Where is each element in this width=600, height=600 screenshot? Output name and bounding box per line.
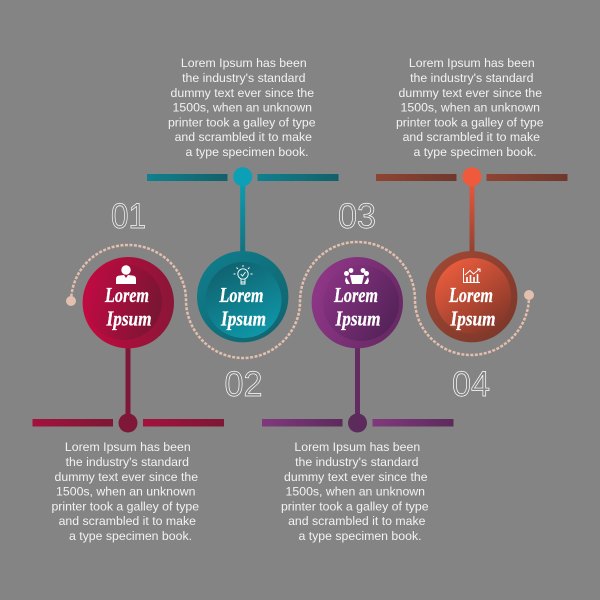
circle badge 3	[312, 257, 403, 348]
circle badge 1	[83, 257, 174, 348]
badge label 3	[333, 283, 380, 330]
number 02: 02	[224, 365, 262, 404]
badge label 4: Lorem	[448, 283, 493, 307]
connector stem and bar 4	[376, 167, 568, 255]
dotted winding path	[66, 242, 534, 358]
text block 3: printer took a galley of type	[281, 499, 429, 513]
text block 4: the industry's standard	[410, 71, 534, 85]
text block 2: printer took a galley of type	[168, 115, 316, 129]
connector stem and bar 2	[147, 167, 338, 255]
connector stem and bar 1	[32, 345, 224, 432]
connector stem and bar 3	[262, 345, 454, 432]
badge label 2	[219, 283, 266, 330]
badge label 2: Lorem	[219, 283, 264, 307]
number 03: 03	[338, 197, 376, 236]
text block 2: and scrambled it to make	[175, 130, 312, 144]
text block 3: dummy text ever since the	[284, 470, 428, 484]
text block 4: Lorem Ipsum has been	[409, 56, 535, 70]
text block 1: 1500s, when an unknown	[56, 485, 196, 499]
badge label 1: Lorem	[104, 283, 149, 307]
text block 3: the industry's standard	[295, 455, 419, 469]
text block 2: dummy text ever since the	[171, 86, 314, 100]
badge label 4: Ipsum	[450, 306, 496, 330]
badge label 1	[104, 283, 152, 330]
circle badge 2	[197, 251, 288, 342]
text block 1: printer took a galley of type	[51, 499, 199, 513]
text block 1: Lorem Ipsum has been	[65, 440, 191, 454]
text block 1: a type specimen book.	[69, 529, 192, 543]
badge label 3: Lorem	[333, 283, 378, 307]
badge label 1: Ipsum	[106, 306, 152, 330]
text block 1: and scrambled it to make	[59, 514, 196, 528]
badge label 2: Ipsum	[220, 306, 266, 330]
text block 3: a type specimen book.	[298, 529, 422, 543]
text block 2: 1500s, when an unknown	[173, 101, 312, 115]
badge label 3: Ipsum	[335, 306, 380, 330]
icon: team meeting	[344, 268, 369, 284]
text block 1: dummy text ever since the	[55, 470, 198, 484]
text block 1: the industry's standard	[66, 455, 189, 469]
icon: bar chart	[464, 268, 480, 282]
text block 3: Lorem Ipsum has been	[294, 440, 420, 454]
circle badge 4	[426, 251, 517, 342]
text block 4: dummy text ever since the	[399, 86, 542, 100]
text block 4: and scrambled it to make	[403, 130, 540, 144]
number 04: 04	[452, 365, 490, 404]
text block 4: a type specimen book.	[413, 145, 537, 159]
step 03	[262, 197, 454, 543]
text block 3: 1500s, when an unknown	[286, 485, 425, 499]
text block 3: and scrambled it to make	[288, 514, 426, 528]
icon: light bulb	[234, 265, 252, 284]
text block 2: Lorem Ipsum has been	[181, 56, 307, 70]
number 01: 01	[111, 197, 146, 236]
text block 4: printer took a galley of type	[396, 115, 544, 129]
badge label 4	[448, 283, 496, 330]
step 04	[376, 56, 568, 404]
text block 2: a type specimen book.	[185, 145, 309, 159]
step 02	[147, 56, 338, 404]
icon: person	[116, 265, 136, 284]
text block 2: the industry's standard	[182, 71, 306, 85]
step 01	[32, 197, 224, 543]
text block 4: 1500s, when an unknown	[401, 101, 540, 115]
